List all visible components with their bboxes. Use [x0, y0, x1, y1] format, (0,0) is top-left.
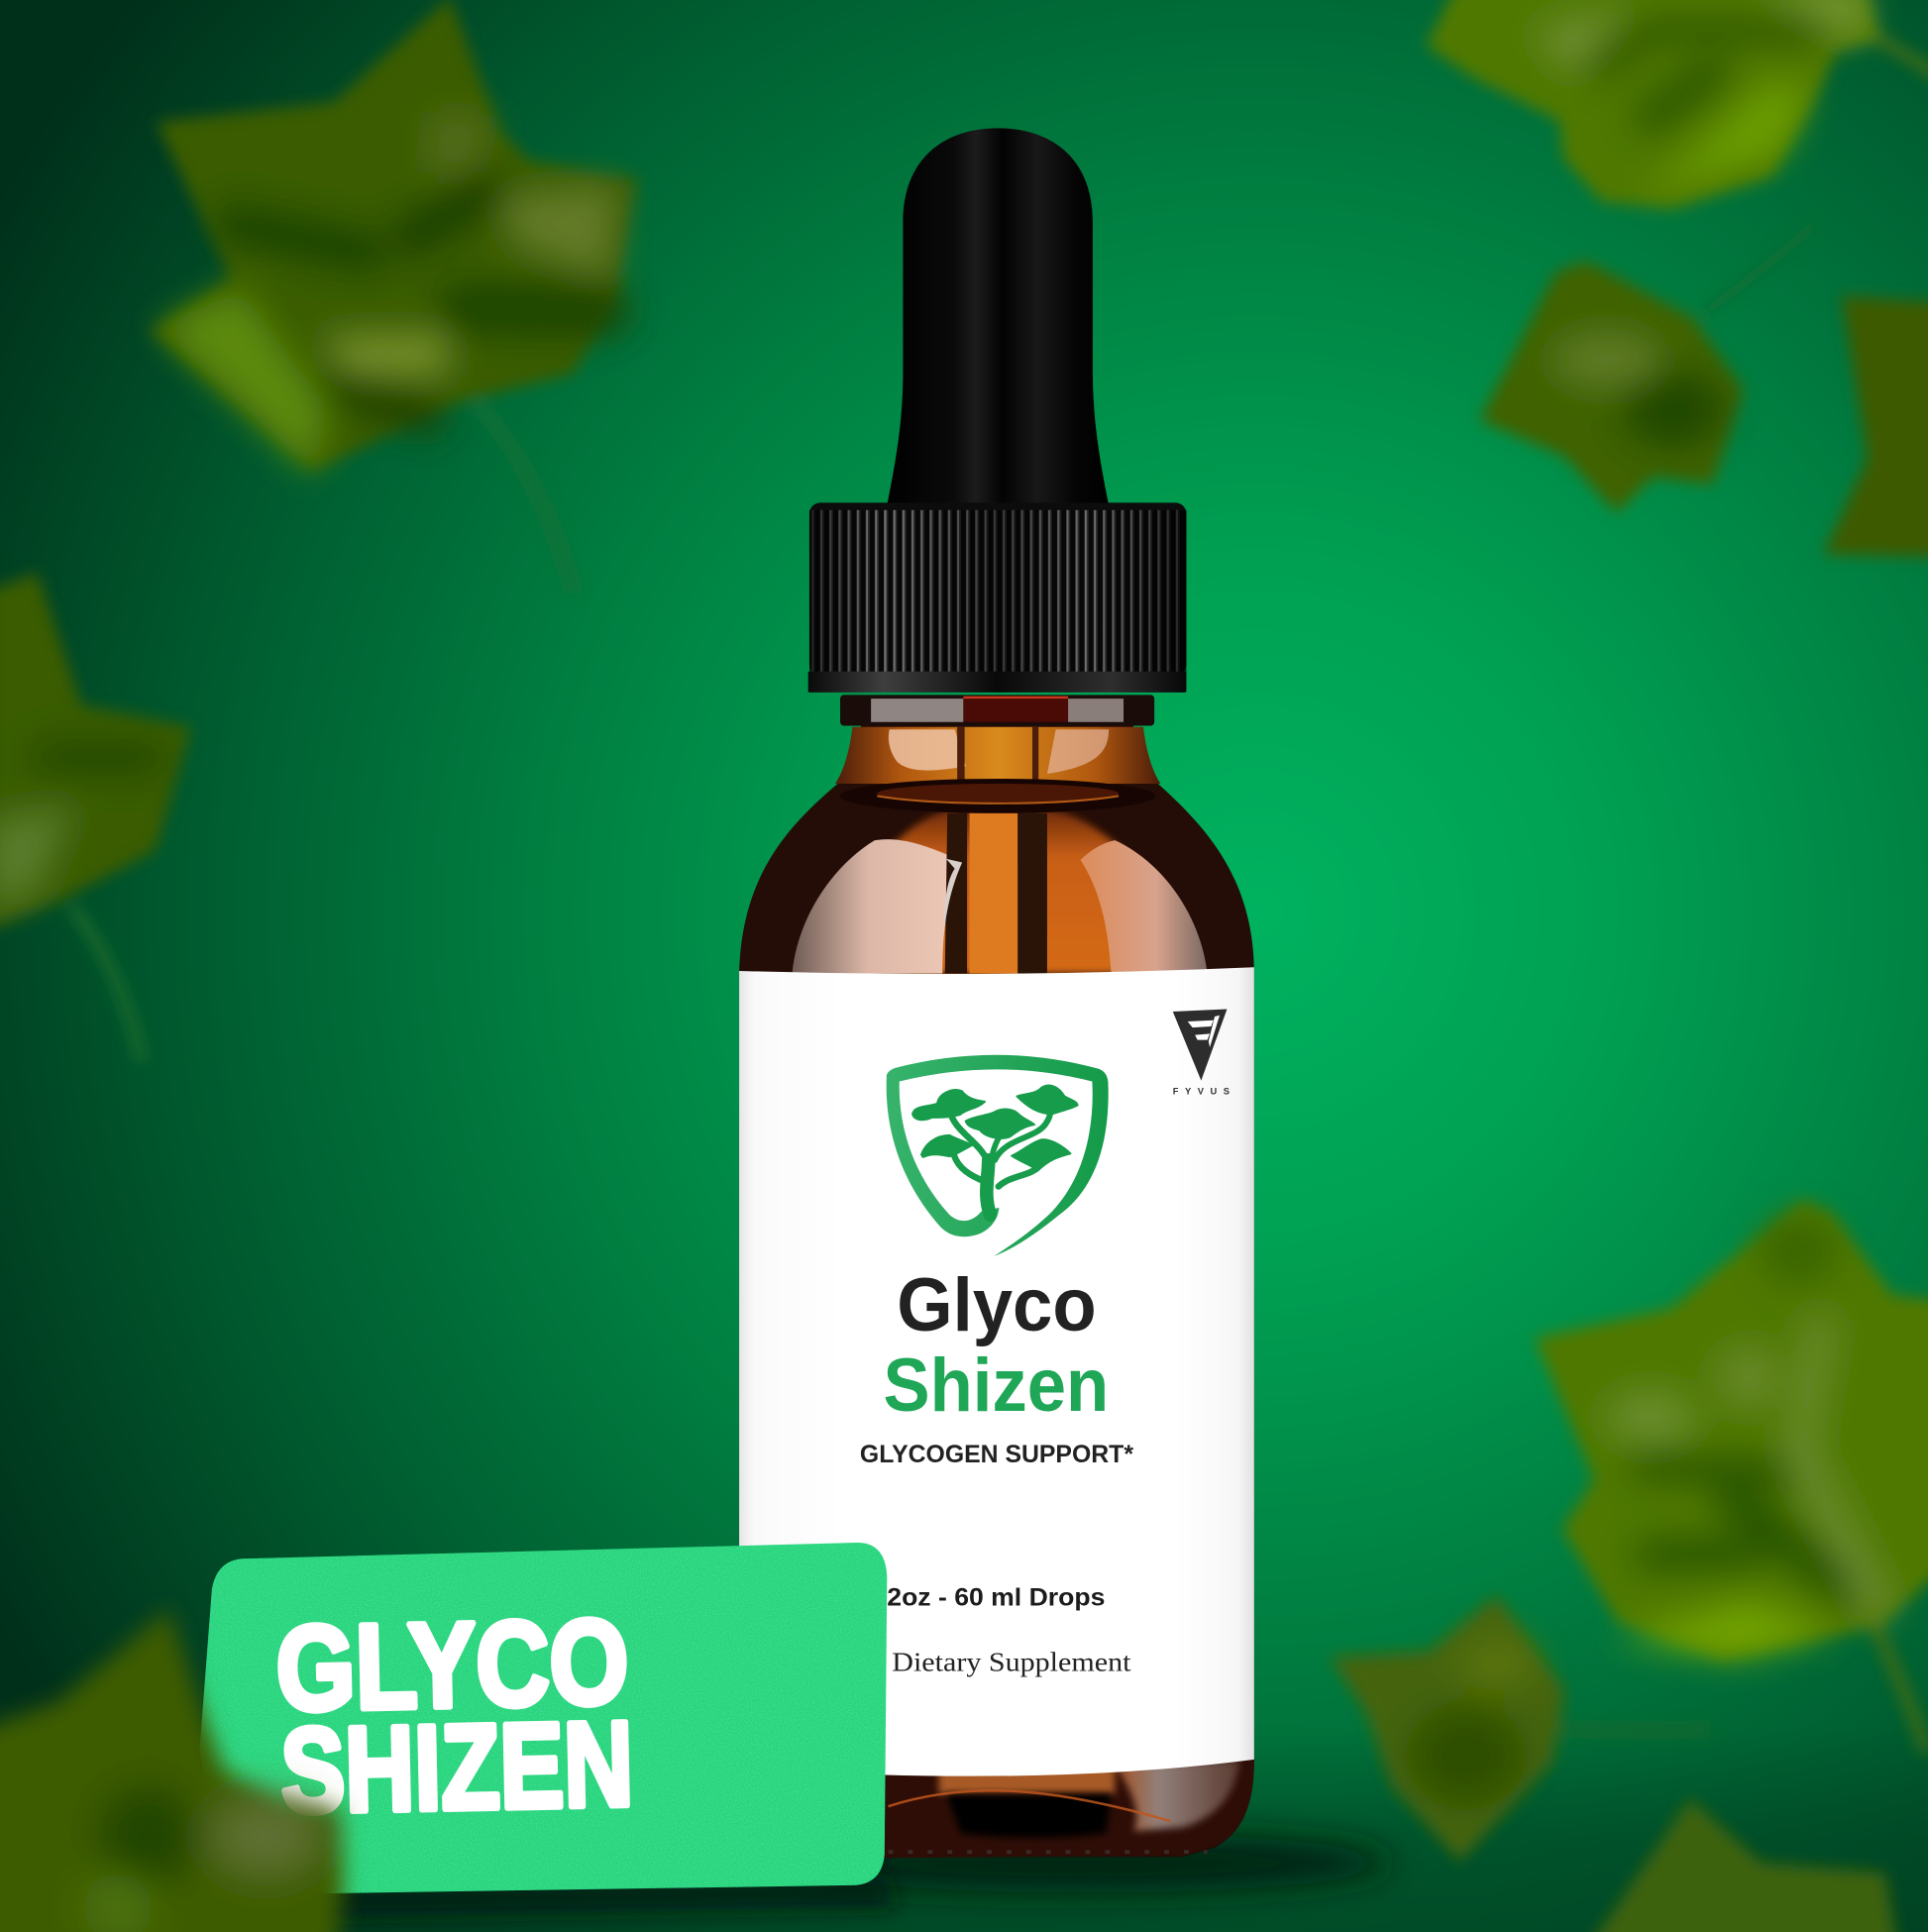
tagline: GLYCOGEN SUPPORT* [860, 1441, 1133, 1468]
leaf: bottom centre right [1331, 1595, 1715, 1861]
dropper cap [808, 502, 1186, 693]
leaf: bottom right small [1589, 1799, 1897, 1932]
logo: FYVUS: FYVUS [1173, 1086, 1230, 1096]
leaf: left middle [0, 573, 191, 1062]
logo: shield and tree [887, 1055, 1109, 1256]
leaf: foreground bottom left [0, 1609, 344, 1932]
card title: SHIZEN [279, 1696, 634, 1838]
leaf: top right [1427, 0, 1928, 208]
logo: FYVUS [1173, 1010, 1230, 1096]
dropper bulb [887, 128, 1109, 505]
bottle shadow [776, 1834, 1392, 1892]
green brand card [199, 1543, 887, 1895]
card title [274, 1594, 634, 1838]
supplement text: Dietary Supplement [892, 1647, 1131, 1677]
dropper bottle [739, 128, 1254, 1858]
neck collar [840, 695, 1154, 725]
white label [739, 967, 1254, 1776]
leaf: right middle [1479, 222, 1818, 512]
volume: 2oz - 60 ml Drops [887, 1583, 1105, 1611]
bottle base [862, 1757, 1254, 1858]
product name: Shizen [884, 1343, 1109, 1428]
product name: Glyco [897, 1263, 1097, 1347]
bottle glass [739, 724, 1254, 1857]
leaf: bottom right large [1535, 1199, 1928, 1752]
product name [884, 1263, 1109, 1428]
card shadow [308, 1876, 897, 1917]
leaf: right edge [1823, 295, 1928, 557]
card title: GLYCO [274, 1594, 630, 1736]
leaf: top left [149, 0, 637, 593]
